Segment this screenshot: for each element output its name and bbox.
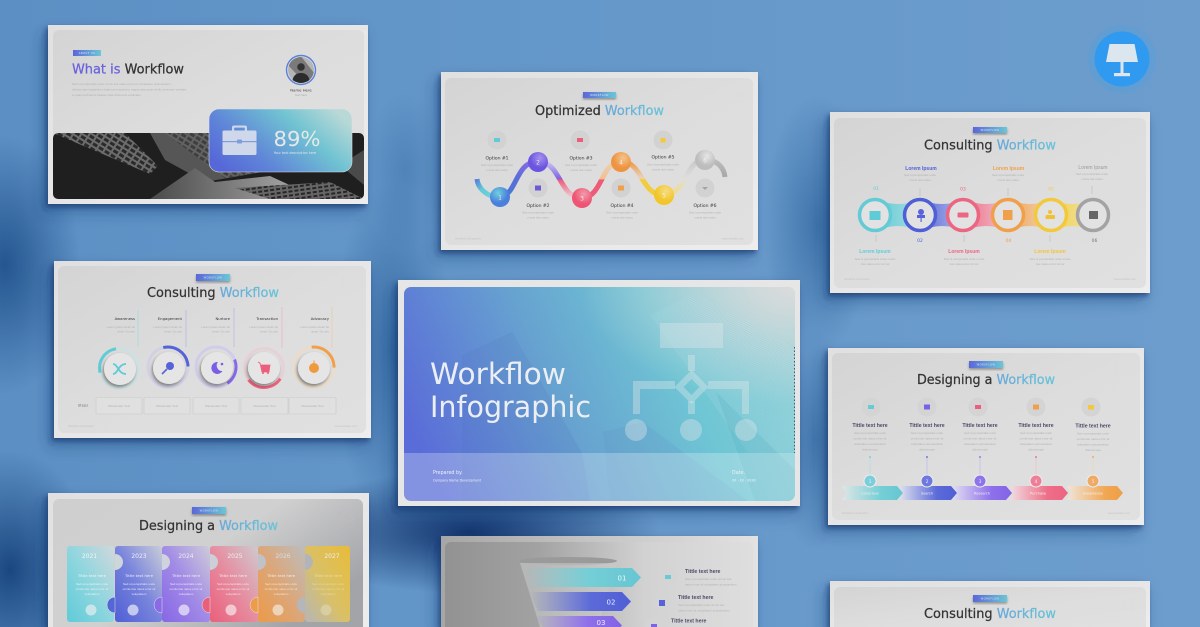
footer xyxy=(844,277,1137,281)
tag: WORKFLOW xyxy=(204,276,222,280)
ring: Engagement: amet. Do sim xyxy=(164,330,182,334)
column 5: omnis iste natus error sit xyxy=(1077,437,1110,441)
column 4: omnis iste natus error sit xyxy=(1020,436,1053,440)
puzzle piece 2025: Tittle text here xyxy=(218,573,248,578)
step 06 ring xyxy=(1076,165,1108,244)
text: date: XX - XX - XXXX xyxy=(732,478,757,482)
step 03 ring: Sed ut perspiciatis unde omnis xyxy=(944,257,985,261)
option 5: Option #5 xyxy=(651,154,675,160)
tag: WORKFLOW xyxy=(981,128,999,132)
tag: WORKFLOW xyxy=(977,363,995,367)
panel: slide 14, funnel xyxy=(441,536,758,627)
node 4 xyxy=(611,152,631,172)
chart: wave timeline xyxy=(477,150,725,208)
column 5: Tittle text here xyxy=(1075,424,1111,430)
chevron process: 2 xyxy=(926,479,929,485)
column 5 xyxy=(1075,398,1111,475)
step 01 ring xyxy=(855,186,896,266)
step 06 ring: Lorem Ipsum xyxy=(1078,165,1108,171)
puzzle piece 2021: Sed ut perspiciatis unde xyxy=(76,582,108,586)
option 1 xyxy=(481,130,513,172)
step 04 ring: omnis iste natus xyxy=(997,178,1019,182)
page number: 2 xyxy=(347,40,355,57)
chevron process: 5 xyxy=(1092,479,1095,485)
puzzle piece 2026: voluptatem xyxy=(274,592,289,596)
item 02: Tittle text here xyxy=(678,595,713,601)
node 3 xyxy=(572,188,592,208)
column 2 xyxy=(909,398,945,475)
panel: slide 6, Optimized Workflow xyxy=(441,72,758,250)
step 06 ring: Sed ut perspiciatis unde xyxy=(1076,172,1108,176)
step 03 ring: 03 xyxy=(960,186,966,192)
column 4 xyxy=(1018,398,1054,475)
footer xyxy=(68,424,358,428)
column 2: doloremque xyxy=(919,448,935,452)
title: Workflow Infographic: Infographic xyxy=(430,390,591,424)
ring: Awareness: Awareness xyxy=(115,316,135,321)
page number: 6 xyxy=(736,88,744,105)
puzzle piece 2025 xyxy=(202,546,258,622)
chevron process: Research xyxy=(974,492,990,496)
panel: slide 2, What is Workflow xyxy=(48,25,368,204)
column 2: Tittle text here xyxy=(909,423,945,429)
ring: Awareness: amet. Do sim xyxy=(117,330,135,334)
column 1: omnis iste natus error sit xyxy=(854,436,887,440)
footer: Workflow Infographic xyxy=(455,236,482,240)
card: 89 percent stat xyxy=(209,109,352,172)
panel: slide 10, Consulting Workflow rings xyxy=(54,261,371,438)
chevron process: 1 xyxy=(869,479,872,485)
tag: WORKFLOW xyxy=(981,597,999,601)
chevron process: 4 xyxy=(1035,479,1038,485)
option 5: Sed ut perspiciatis unde xyxy=(647,162,679,166)
item 03: Tittle text here xyxy=(671,618,706,624)
puzzle piece 2026: Tittle text here xyxy=(266,573,296,578)
item 03 xyxy=(645,618,706,627)
chart: ring chain connectors xyxy=(876,199,1093,231)
heading: Consulting Workflow xyxy=(924,138,1056,154)
option 4: Sed ut perspiciatis unde xyxy=(606,210,638,214)
puzzle piece 2021 xyxy=(67,546,114,622)
ring: Nurture: amet. Do sim xyxy=(212,330,230,334)
item 02 xyxy=(653,594,730,612)
option 4: omnis iste natus xyxy=(611,216,633,220)
table: steps: Placeholder Text xyxy=(108,404,130,408)
footer xyxy=(842,511,1131,515)
column 4: doloremque xyxy=(1028,448,1044,452)
text block: intro: et quasi architecto beatae vitae dicta sunt explicabo. xyxy=(72,93,142,97)
column 3: doloremque xyxy=(972,448,988,452)
step 04 ring: Lorem Ipsum xyxy=(993,166,1025,172)
page number: 7 xyxy=(1128,128,1136,145)
column 3: omnis iste natus error sit xyxy=(964,436,997,440)
option 4: Option #4 xyxy=(610,203,634,209)
puzzle piece 2023: omnis iste natus error sit xyxy=(123,587,156,591)
column 2: omnis iste natus error sit xyxy=(911,436,944,440)
puzzle piece 2026: 2026 xyxy=(275,553,291,560)
option 4 xyxy=(606,178,638,220)
chevron process: Purchase xyxy=(1030,492,1046,496)
ring: Engagement: Lorem ipsum dolor sit xyxy=(153,325,182,329)
item 02: natus error sit voluptatem accusantium xyxy=(678,608,730,612)
puzzle piece 2027: Tittle text here xyxy=(313,573,343,578)
column 4: Tittle text here xyxy=(1018,423,1054,429)
text: prepared by: Prepared by. xyxy=(433,470,463,476)
step 03 ring: Lorem Ipsum xyxy=(948,249,980,255)
avatar: Name Here xyxy=(285,55,318,97)
step 03 ring: iste natus error sit vol xyxy=(950,262,979,266)
table: steps: Steps xyxy=(78,402,88,408)
node 5: 5 xyxy=(662,192,666,200)
puzzle piece 2027: omnis iste natus error sit xyxy=(312,587,345,591)
panel: cover slide, Workflow Infographic xyxy=(398,280,800,506)
puzzle piece 2024: omnis iste natus error sit xyxy=(170,587,203,591)
node 4: 4 xyxy=(619,160,623,166)
puzzle piece 2027: Sed ut perspiciatis unde xyxy=(312,582,344,586)
puzzle piece 2024: 2024 xyxy=(178,553,194,560)
step 04 ring: 04 xyxy=(1006,238,1011,244)
chevron process: Conscious xyxy=(861,492,879,496)
column 3 xyxy=(962,398,998,475)
chart: funnel body xyxy=(519,557,641,627)
option 6: Option #6 xyxy=(693,203,717,209)
puzzle piece 2026: omnis iste natus error sit xyxy=(265,587,298,591)
tag: about us xyxy=(73,50,101,56)
column 4: Sed ut perspiciatis unde xyxy=(1020,431,1052,435)
node 2 xyxy=(528,152,548,172)
panel: slide 7, Consulting Workflow xyxy=(830,112,1150,293)
node 1 xyxy=(490,187,510,207)
footer xyxy=(455,236,745,240)
tag xyxy=(196,274,230,281)
footer: Workflow Infographic xyxy=(842,511,869,515)
ring: Transaction: Lorem ipsum dolor sit xyxy=(249,325,278,329)
tag xyxy=(192,507,226,514)
column 3: voluptatem accusantium xyxy=(964,442,997,446)
heading: Designing a Workflow xyxy=(139,519,278,534)
step 05 ring: iste natus error sit vol xyxy=(1036,262,1065,266)
step 02 ring: Sed ut perspiciatis unde xyxy=(904,173,936,177)
ring: Transaction xyxy=(237,307,291,395)
column 1: voluptatem accusantium xyxy=(854,442,887,446)
avatar: Name Here: Name Here xyxy=(290,88,312,92)
option 5: omnis iste natus xyxy=(652,168,674,172)
column 3: Sed ut perspiciatis unde xyxy=(964,431,996,435)
option 2: Option #2 xyxy=(526,203,550,209)
ring: Advocacy: Advocacy xyxy=(311,316,330,321)
heading: Designing a Workflow xyxy=(917,373,1055,388)
heading: What is Workflow: What is Workflow xyxy=(72,62,184,78)
option 1: Sed ut perspiciatis unde xyxy=(481,163,513,167)
chevron process xyxy=(842,475,1123,500)
item 01: Tittle text here xyxy=(685,569,720,575)
option 3 xyxy=(565,130,597,172)
node 6: 6 xyxy=(703,158,707,164)
stat: 89%: 89% xyxy=(274,127,320,151)
text: prepared by xyxy=(433,470,482,482)
step 06 ring: omnis iste natus xyxy=(1081,177,1103,181)
option 2: omnis iste natus xyxy=(527,216,549,220)
page number: 10 xyxy=(338,273,357,292)
option 6 xyxy=(689,178,721,220)
footer: www.website.com xyxy=(335,424,358,428)
step 01 ring: 01 xyxy=(873,186,879,192)
step 02 ring: Lorem Ipsum xyxy=(905,166,937,172)
item 01: Sed ut perspiciatis unde omnis iste xyxy=(685,577,732,581)
tag xyxy=(583,92,616,98)
puzzle piece 2025: 2025 xyxy=(227,553,243,560)
tag xyxy=(969,361,1003,368)
column 5: doloremque xyxy=(1085,448,1101,452)
ring: Nurture xyxy=(190,308,242,393)
image: grayscale building photo xyxy=(53,133,364,199)
table: steps: Placeholder Text xyxy=(301,404,324,408)
step 02 ring xyxy=(904,166,937,244)
text block: intro xyxy=(72,82,187,97)
puzzle piece 2024: voluptatem xyxy=(179,592,194,596)
puzzle piece 2021: voluptatem xyxy=(85,592,100,596)
puzzle piece 2024: Sed ut perspiciatis unde xyxy=(170,582,202,586)
option 1: Option #1 xyxy=(485,156,509,162)
puzzle piece 2026: Sed ut perspiciatis unde xyxy=(265,582,297,586)
tag: WORKFLOW xyxy=(200,509,218,513)
column 2: Sed ut perspiciatis unde xyxy=(911,431,943,435)
puzzle piece 2021: 2021 xyxy=(82,553,97,560)
footer: www.website.com xyxy=(722,236,745,240)
ring: Advocacy: amet. Do sim xyxy=(311,330,329,334)
panel: slide 12, Designing a Workflow xyxy=(828,348,1144,525)
arrow 01: 01 xyxy=(618,574,626,582)
text block: intro: Sed ut perspiciatis unde omnis iste natus error sit voluptatem accusantium xyxy=(72,82,171,86)
ring: Advocacy: Lorem ipsum dolor sit xyxy=(300,325,329,329)
option 6: Sed ut perspiciatis unde xyxy=(689,210,721,214)
table: steps: Placeholder Text xyxy=(253,404,276,408)
image: faint buildings xyxy=(650,294,795,501)
option 2: Sed ut perspiciatis unde xyxy=(522,210,554,214)
puzzle piece 2024: Tittle text here xyxy=(171,573,201,578)
table: steps xyxy=(78,398,336,414)
step 06 ring: 06 xyxy=(1092,238,1097,244)
step 05 ring: Sed ut perspiciatis unde omnis xyxy=(1030,257,1071,261)
text: prepared by: Company Name Development xyxy=(433,478,482,482)
chevron process: 3 xyxy=(979,479,982,485)
footer: Workflow Infographic xyxy=(68,424,95,428)
caption: Your text description here xyxy=(274,151,316,155)
option 6: omnis iste natus xyxy=(694,216,716,220)
column 5: voluptatem accusantium xyxy=(1077,442,1110,446)
item 02: Sed ut perspiciatis unde omnis iste xyxy=(678,603,725,607)
icon: flow diagram xyxy=(625,323,757,441)
footer: Workflow Infographic xyxy=(844,277,871,281)
ring: Engagement: Engagement xyxy=(158,316,183,321)
text block: intro: doloremque laudantium totam rem aperiam, eaque ipsa quae ab illo inventore veritatis xyxy=(72,88,187,92)
ring: Nurture: Lorem ipsum dolor sit xyxy=(201,325,230,329)
panel: slide 13, Designing a Workflow puzzle xyxy=(48,493,369,627)
ring: Transaction: Transaction xyxy=(255,316,279,321)
table: steps: Placeholder Text xyxy=(156,404,178,408)
node 3: 3 xyxy=(580,196,584,202)
puzzle piece 2021: Tittle text here xyxy=(77,573,107,578)
band: prepared by footer xyxy=(404,453,795,501)
puzzle piece 2023: 2023 xyxy=(131,553,147,560)
step 02 ring: omnis iste natus xyxy=(909,178,931,182)
puzzle piece 2023: Tittle text here xyxy=(124,573,154,578)
table: steps: Placeholder Text xyxy=(205,404,227,408)
heading: Consulting Workflow xyxy=(147,286,279,301)
node 2: 2 xyxy=(536,160,540,166)
step 05 ring: 05 xyxy=(1048,186,1054,192)
title: Workflow Infographic: Workflow xyxy=(430,357,566,391)
heading: Consulting Workflow xyxy=(924,607,1056,622)
footer: www.website.com xyxy=(1108,511,1131,515)
arrow 02: 02 xyxy=(607,598,615,606)
option 5 xyxy=(647,130,679,172)
node 5 xyxy=(654,185,674,205)
page number: 12 xyxy=(1111,360,1130,379)
step 02 ring: 02 xyxy=(917,238,923,244)
puzzle piece 2023: Sed ut perspiciatis unde xyxy=(123,582,155,586)
text: date xyxy=(732,470,757,482)
ring: Advocacy xyxy=(292,307,336,389)
step 05 ring: Lorem Ipsum xyxy=(1034,249,1066,255)
puzzle piece 2023 xyxy=(107,546,162,622)
puzzle piece 2027: voluptatem xyxy=(321,592,336,596)
option 3: omnis iste natus xyxy=(570,168,592,172)
ring: Awareness xyxy=(96,310,142,391)
puzzle piece 2027: 2027 xyxy=(324,553,340,560)
ring: Engagement xyxy=(144,310,192,391)
node 1: 1 xyxy=(498,194,502,202)
puzzle piece 2024 xyxy=(154,546,210,622)
step 05 ring xyxy=(1030,186,1071,266)
puzzle piece 2023: voluptatem xyxy=(132,592,147,596)
step 04 ring xyxy=(992,166,1025,244)
panel: slide 11, Consulting Workflow xyxy=(830,581,1150,627)
step 01 ring: Sed ut perspiciatis unde omnis xyxy=(855,257,896,261)
node 6 xyxy=(695,150,715,170)
column 2: voluptatem accusantium xyxy=(911,442,944,446)
step 04 ring: Sed ut perspiciatis unde xyxy=(992,173,1024,177)
puzzle piece 2025: voluptatem xyxy=(226,592,241,596)
tag xyxy=(973,127,1007,133)
column 3: Tittle text here xyxy=(962,423,998,429)
page number: 14 xyxy=(727,552,744,569)
tag: about us: ABOUT US xyxy=(79,51,95,55)
puzzle piece 2026 xyxy=(250,546,305,622)
icon: Keynote logo badge xyxy=(1088,25,1156,93)
option 3: Option #3 xyxy=(569,156,593,162)
column 1: Sed ut perspiciatis unde xyxy=(854,431,886,435)
ring: Awareness: Lorem ipsum dolor sit xyxy=(106,325,135,329)
step 01 ring: Lorem Ipsum xyxy=(859,249,891,255)
option 2 xyxy=(522,178,554,220)
option 3: Sed ut perspiciatis unde xyxy=(565,163,597,167)
arrow 03: 03 xyxy=(597,619,605,627)
puzzle piece 2021: omnis iste natus error sit xyxy=(76,587,109,591)
column 1: Tittle text here xyxy=(852,423,888,429)
puzzle piece 2025: omnis iste natus error sit xyxy=(217,587,250,591)
avatar: Name Here: Text here xyxy=(295,93,307,97)
column 1: doloremque xyxy=(862,448,878,452)
puzzle piece 2025: Sed ut perspiciatis unde xyxy=(217,582,249,586)
tag xyxy=(973,595,1007,602)
column 5: Sed ut perspiciatis unde xyxy=(1077,432,1109,436)
ring: Transaction: amet. Do sim xyxy=(260,330,278,334)
item 01: natus error sit voluptatem accusantium xyxy=(685,582,737,586)
item 01 xyxy=(659,568,737,586)
icon: briefcase xyxy=(222,126,256,155)
column 4: voluptatem accusantium xyxy=(1020,442,1053,446)
footer: www.website.com xyxy=(1114,277,1137,281)
page number: 11 xyxy=(1119,597,1136,614)
tag: WORKFLOW xyxy=(590,93,609,97)
step 03 ring xyxy=(944,186,985,266)
heading: Optimized Workflow xyxy=(535,104,664,119)
text: date: Date. xyxy=(732,470,745,476)
chevron process: Experience xyxy=(1083,492,1103,496)
ring: Nurture: Nurture xyxy=(215,316,231,321)
puzzle piece 2027 xyxy=(297,546,350,622)
option 1: omnis iste natus xyxy=(486,168,508,172)
step 01 ring: iste natus error sit vol xyxy=(861,262,890,266)
page number: 13 xyxy=(336,509,354,526)
title: Workflow Infographic xyxy=(430,357,591,424)
column 1 xyxy=(852,398,888,475)
chevron process: Search xyxy=(921,492,933,496)
